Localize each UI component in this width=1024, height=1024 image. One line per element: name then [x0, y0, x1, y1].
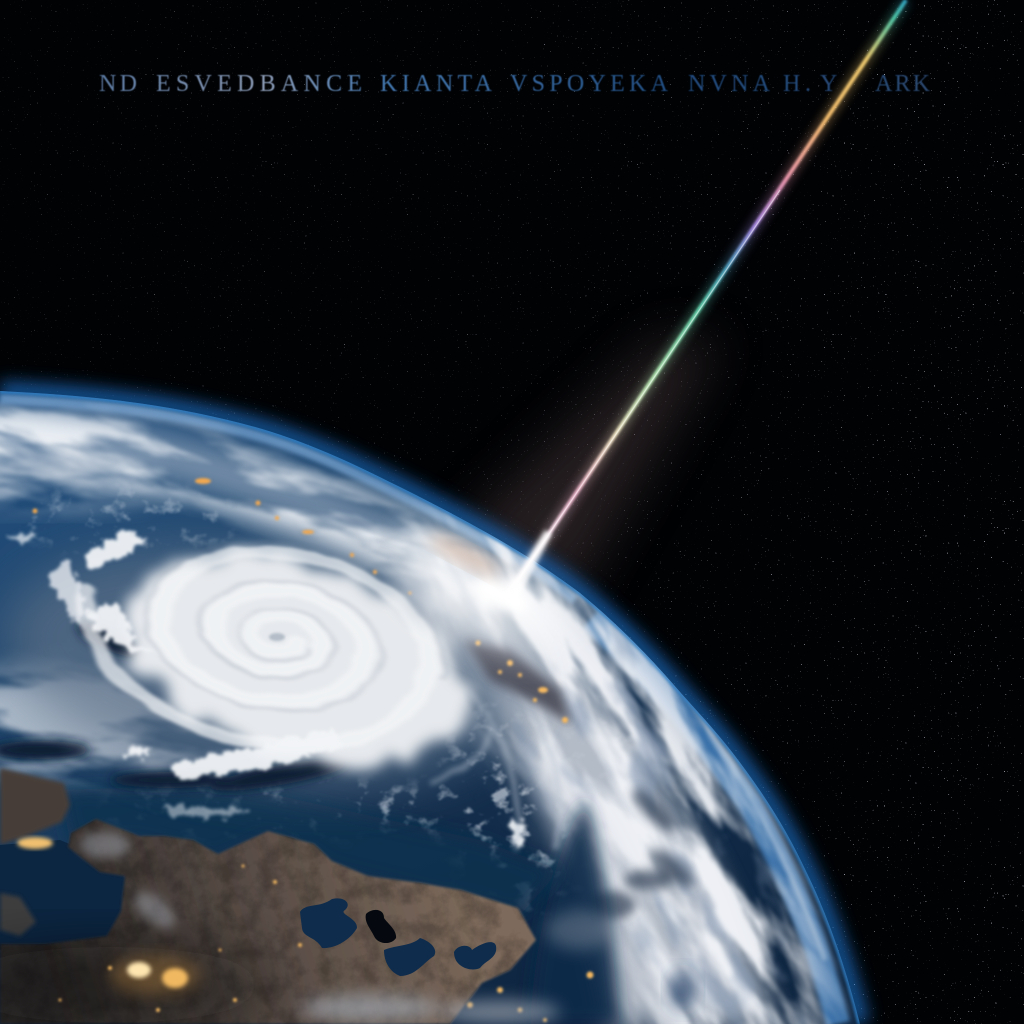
beam base flare: [502, 530, 552, 602]
beam glow: [508, 0, 906, 595]
northern sea: [60, 785, 560, 915]
top limb blue: [0, 399, 575, 600]
lake west: [300, 898, 357, 948]
impact glow: [382, 512, 578, 668]
title text: NVNA: [688, 71, 771, 97]
land mass: [0, 768, 594, 1024]
dark land under clouds with lights: [465, 640, 572, 725]
beam white core: [508, 190, 780, 595]
title text: ESVEDBANCE: [156, 71, 362, 97]
title text: [99, 71, 931, 97]
right limb blue band: [590, 620, 838, 1024]
light beam: [502, 0, 906, 602]
outer haze: [0, 515, 533, 815]
white spiral: [62, 507, 448, 780]
northwest city: [17, 837, 53, 849]
grey rain bands: [129, 513, 465, 750]
snow patches: [79, 832, 181, 935]
eye: [269, 633, 285, 641]
limb white streak: [668, 679, 828, 962]
left grey clouds: [0, 446, 234, 793]
top cloud base: [0, 432, 470, 582]
main city glow: [109, 955, 201, 995]
western peninsula: [0, 768, 70, 845]
limb rim: [0, 391, 860, 1024]
dark cloud gaps: [588, 784, 698, 919]
planet earth: [0, 380, 880, 1024]
spiral arms: [62, 498, 465, 783]
dark ocean under storm edge: [530, 800, 620, 1024]
hurricane: [0, 498, 558, 850]
small bay land: [0, 893, 36, 936]
scattered lights: [58, 864, 594, 1022]
title text: KIANTA: [380, 71, 493, 97]
upper cloud lights: [32, 478, 412, 594]
hurricane core: [100, 516, 496, 804]
title text: ARK: [875, 71, 931, 97]
title text: VSPOYEKA: [510, 71, 669, 97]
southern bottom clouds: [300, 910, 614, 1024]
ocean: [0, 380, 880, 1024]
land lights: [476, 640, 568, 723]
right cloud base: [400, 575, 775, 1024]
beam haze: [450, 340, 720, 600]
title text: Y: [820, 71, 837, 97]
lake east: [454, 942, 496, 969]
title text: ND: [99, 71, 137, 97]
shadowed land patch: [465, 640, 572, 725]
dark ocean patch south: [669, 970, 697, 1010]
southern land: [0, 819, 536, 1024]
black lake: [366, 910, 396, 943]
east rain bands: [430, 680, 558, 850]
atmosphere glow: [0, 391, 860, 1024]
top cloud band: [95, 400, 365, 530]
dark western bay: [0, 840, 130, 950]
dark cloud gaps noise: [522, 654, 758, 906]
cumulus clouds: [5, 530, 526, 848]
land texture: [0, 810, 560, 1024]
land night shadow: [0, 947, 270, 1023]
right cloud band: [519, 653, 761, 907]
title text: H.: [783, 71, 811, 97]
lake south: [384, 938, 435, 976]
beam core: [508, 0, 906, 595]
dark storm shadows: [0, 616, 351, 797]
city lights: [17, 837, 594, 1022]
scattered fine clouds: [28, 486, 632, 912]
